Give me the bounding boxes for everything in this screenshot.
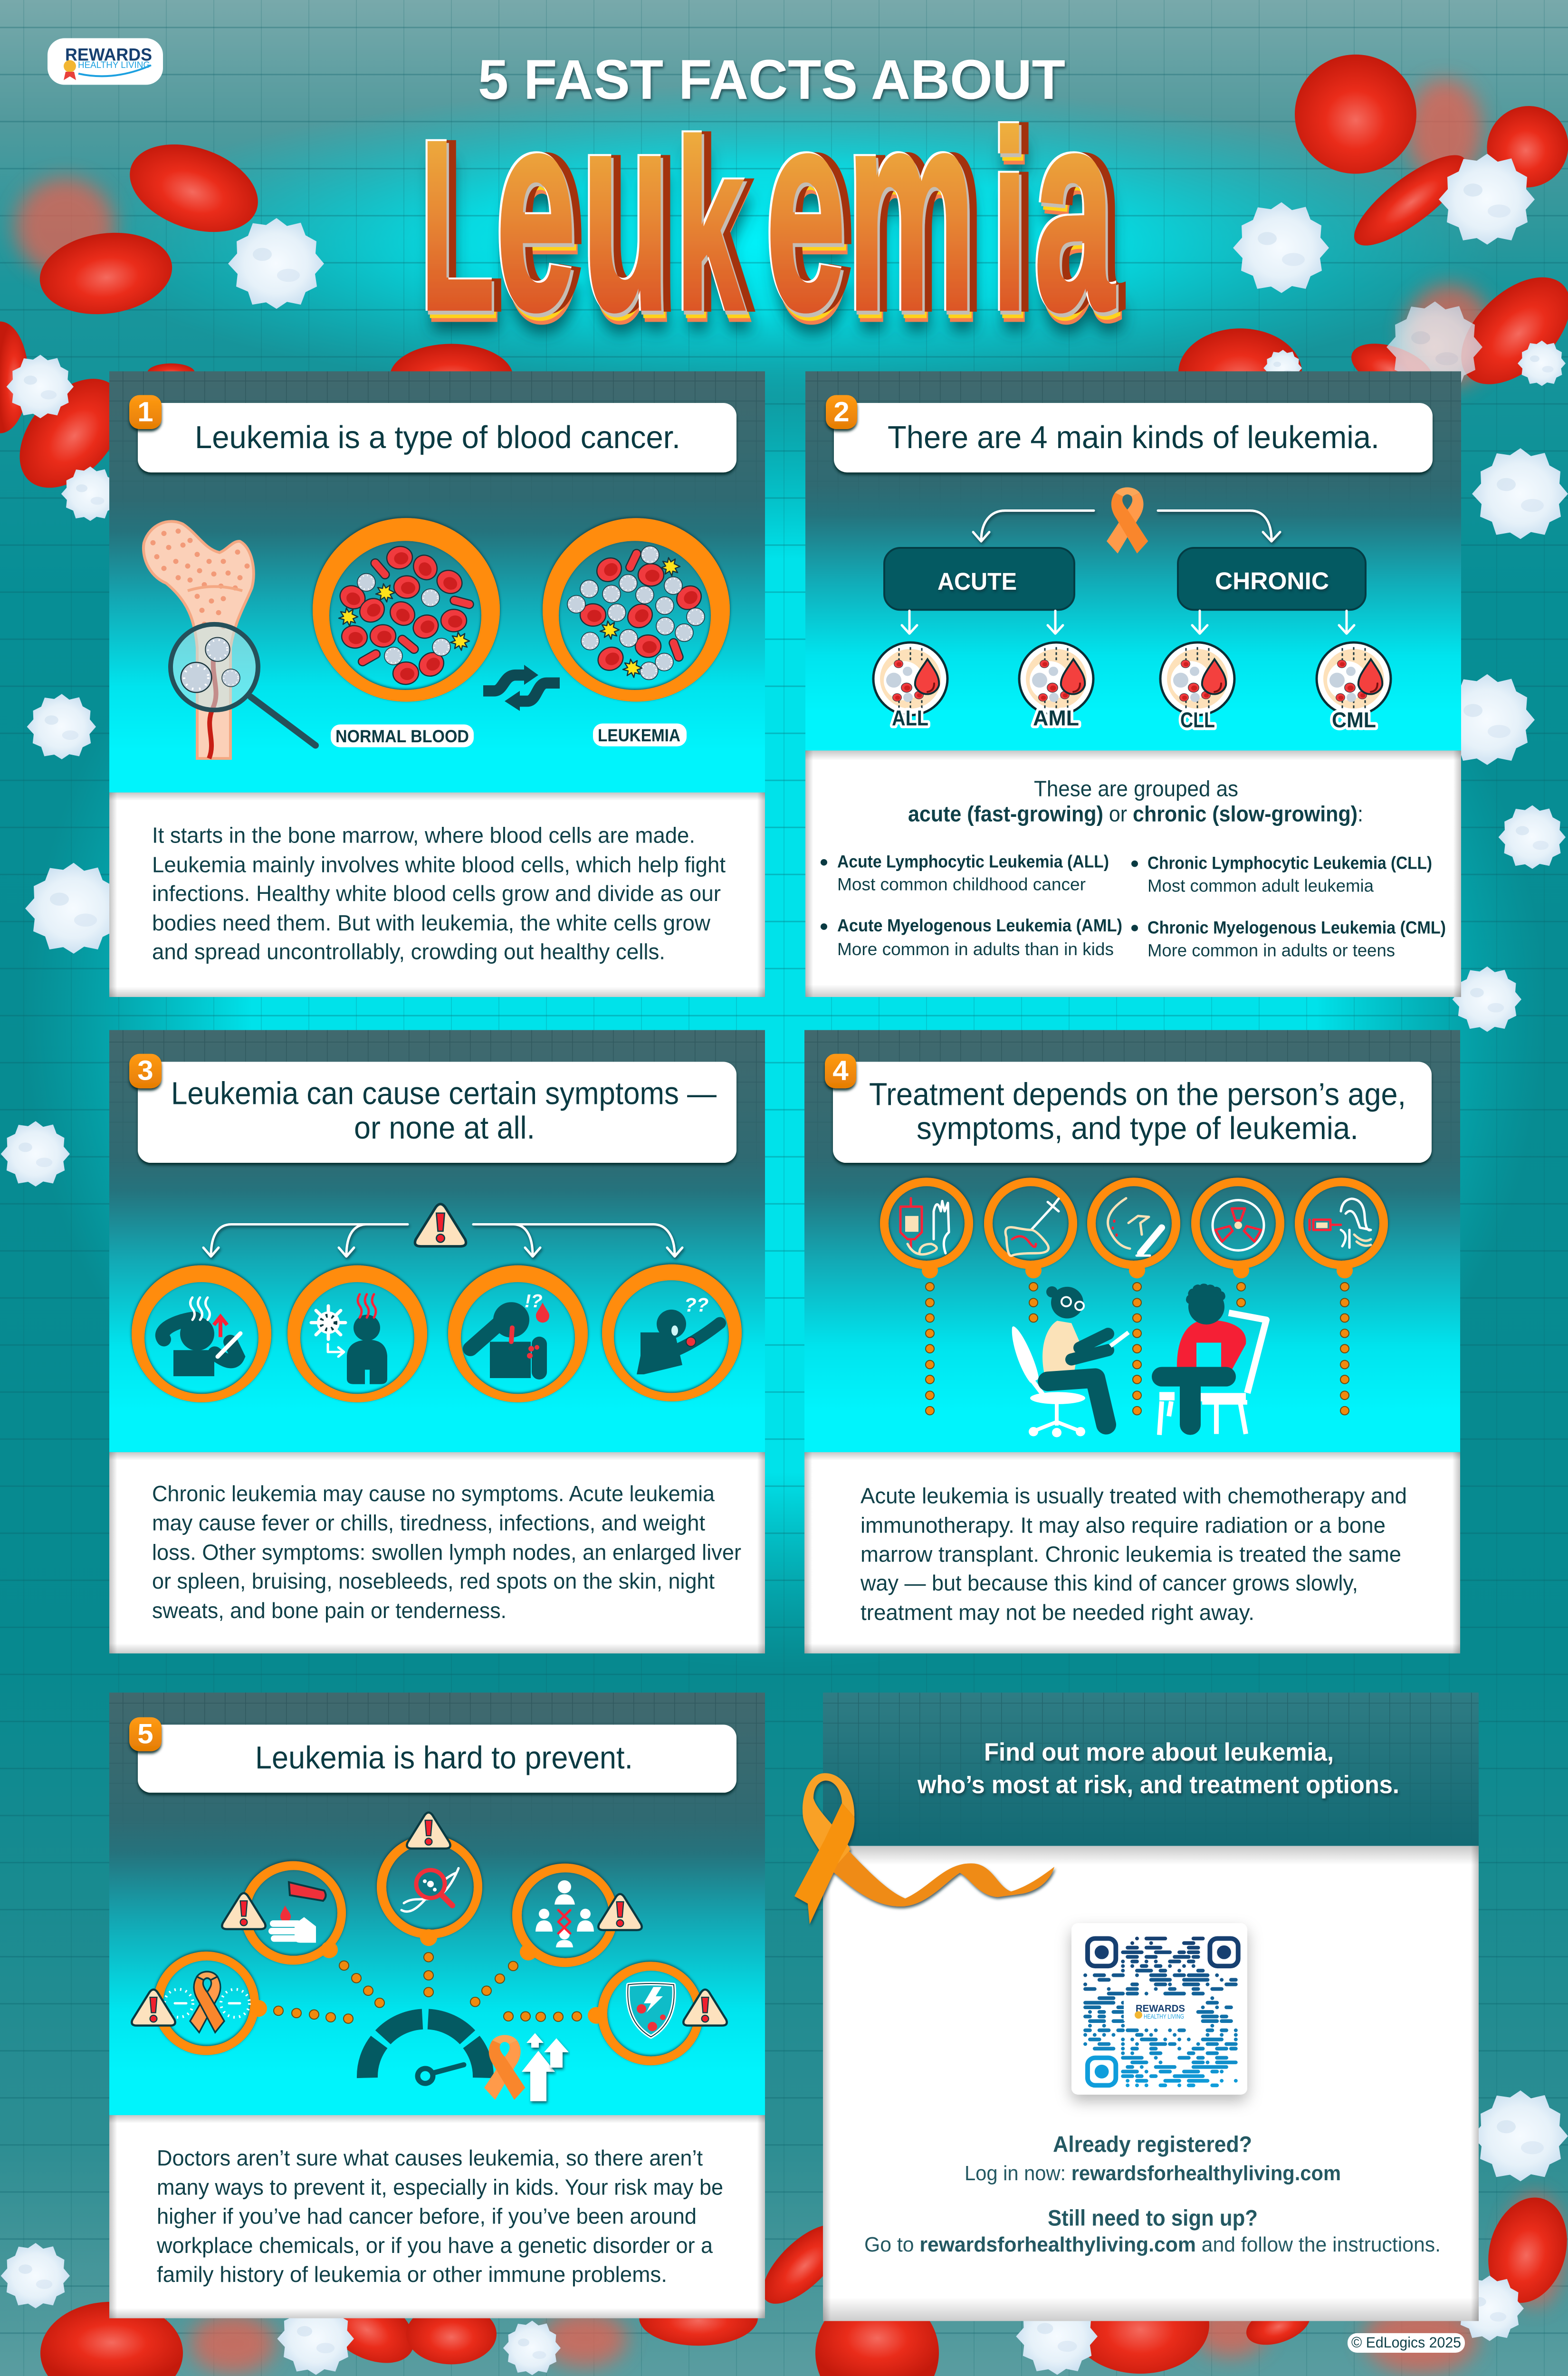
title: Leukemia: a	[1033, 50, 1115, 368]
risk ring: chemicals	[222, 1861, 346, 1964]
icon: CML	[1317, 642, 1391, 732]
call to action header	[823, 1693, 1479, 1846]
treatment ring: radiation	[1191, 1178, 1284, 1278]
list of leukemia types: Acute Lymphocytic Leukemia (ALL)	[837, 852, 1109, 871]
icon: ribbon and up arrows	[484, 2033, 569, 2101]
illustration: doctor	[1013, 1286, 1128, 1437]
heading pill	[138, 1062, 736, 1163]
list of leukemia types: Acute Myelogenous Leukemia (AML)	[837, 915, 1122, 935]
body text 4: marrow transplant. Chronic leukemia is treated the same	[860, 1542, 1401, 1566]
sign in text: Log in now: rewardsforhealthyliving.com	[965, 2163, 1341, 2185]
QR code: HEALTHY LIVING	[1144, 2012, 1184, 2020]
sign in text: Go to rewardsforhealthyliving.com and follow the instructions.	[864, 2234, 1441, 2256]
heading pill: Treatment depends on the person’s age,	[869, 1077, 1406, 1112]
logo	[48, 38, 163, 85]
dotted lines	[926, 1283, 1349, 1415]
box: chronic	[1178, 548, 1366, 610]
logo: HEALTHY LIVING	[78, 60, 150, 70]
number badge 5: 5	[137, 1718, 153, 1749]
title: Leukemia: L	[419, 90, 494, 358]
treatment ring: immunotherapy	[984, 1178, 1077, 1278]
list of leukemia types: Most common adult leukemia	[1147, 876, 1374, 895]
call to action header: who’s most at risk, and treatment options.	[917, 1771, 1399, 1799]
body text 3: or spleen, bruising, nosebleeds, red spots on the skin, night	[152, 1569, 715, 1593]
sign in text	[864, 2132, 1441, 2256]
body text 5: many ways to prevent it, especially in kids. Your risk may be	[157, 2175, 723, 2200]
label: leukemia: LEUKEMIA	[598, 725, 680, 745]
heading pill: Leukemia can cause certain symptoms —	[171, 1076, 717, 1111]
heading pill	[833, 1062, 1432, 1163]
ring: leukemia	[543, 518, 730, 701]
symptom ring: fever	[132, 1265, 271, 1402]
body text 3: sweats, and bone pain or tenderness.	[152, 1598, 507, 1623]
intro text: These are grouped as	[1034, 776, 1238, 801]
copyright: © EdLogics 2025	[1351, 2334, 1461, 2351]
risk ring: family history	[512, 1864, 642, 1967]
risk ring: genetics	[377, 1812, 482, 1946]
symptom ring: skin spots: ??	[684, 1293, 708, 1316]
body text 5: family history of leukemia or other immune problems.	[157, 2262, 667, 2287]
box: acute	[884, 548, 1074, 610]
body text 4: Acute leukemia is usually treated with chemotherapy and	[860, 1484, 1407, 1508]
risk ring: immune problems	[588, 1962, 727, 2065]
body text 3: Chronic leukemia may cause no symptoms. Acute leukemia	[152, 1481, 715, 1506]
body text 5	[156, 2146, 723, 2287]
QR code	[1071, 1923, 1247, 2095]
box: chronic: CHRONIC	[1215, 567, 1329, 594]
icon: CLL	[1160, 642, 1234, 732]
icon: ALL	[873, 642, 947, 730]
body text 4: treatment may not be needed right away.	[860, 1600, 1254, 1625]
treatment ring: transplant	[1087, 1178, 1180, 1278]
logo: REWARDS	[65, 45, 152, 64]
treatment ring: spinal injection	[1295, 1178, 1388, 1278]
panel 5: prevention	[109, 1693, 765, 2318]
panel 3: symptoms	[109, 1030, 765, 1653]
number badge 2: 2	[833, 396, 850, 427]
symptom ring: infections	[287, 1265, 427, 1402]
ring: normal blood	[313, 518, 500, 702]
heading pill	[138, 1725, 736, 1793]
number badge 3	[129, 1054, 162, 1088]
title: Leukemia	[419, 50, 1115, 368]
symptom ring: nosebleed	[448, 1265, 588, 1402]
list of leukemia types: Most common childhood cancer	[837, 874, 1086, 894]
body text 1: infections. Healthy white blood cells grow and divide as our	[152, 881, 721, 906]
number badge 3: 3	[137, 1054, 153, 1086]
heading: 5 fast facts about: 5 FAST FACTS ABOUT	[478, 48, 1065, 111]
symptom ring: skin spots	[602, 1265, 742, 1401]
arrows from warning	[203, 1224, 682, 1256]
body text 3: may cause fever or chills, tiredness, infections, and weight	[152, 1511, 705, 1535]
body text 4: immunotherapy. It may also require radiation or a bone	[860, 1513, 1386, 1537]
heading pill: Leukemia is a type of blood cancer.	[195, 420, 680, 455]
icon: AML: AML	[1033, 706, 1079, 730]
title: Leukemia: e	[765, 50, 845, 368]
illustration: patient	[1159, 1288, 1266, 1435]
heading pill: symptoms, and type of leukemia.	[917, 1111, 1358, 1146]
heading pill	[138, 403, 736, 472]
body text 3: loss. Other symptoms: swollen lymph nodes, an enlarged liver	[152, 1540, 741, 1564]
body text 1	[152, 823, 726, 964]
title: Leukemia: i	[991, 79, 1026, 361]
number badge 5	[129, 1717, 162, 1751]
list of leukemia types: Chronic Myelogenous Leukemia (CML)	[1147, 918, 1446, 938]
body text 5: workplace chemicals, or if you have a genetic disorder or a	[156, 2233, 713, 2258]
body text 1: bodies need them. But with leukemia, the white cells grow	[152, 910, 710, 935]
treatment ring: chemotherapy	[880, 1178, 973, 1278]
sign in text: Already registered?	[1053, 2132, 1252, 2157]
title: Leukemia: k	[675, 90, 744, 358]
body text 1: Leukemia mainly involves white blood cells, which help fight	[152, 853, 726, 877]
icon: large orange ribbon	[794, 1773, 1054, 1924]
icon: orange ribbon	[1107, 487, 1148, 554]
number badge 2	[826, 395, 857, 429]
heading pill	[834, 403, 1433, 472]
icon: warning	[415, 1204, 466, 1246]
number badge 4	[825, 1054, 856, 1088]
intro text: acute (fast-growing) or chronic (slow-growing):	[908, 802, 1363, 826]
heading pill: There are 4 main kinds of leukemia.	[888, 420, 1379, 455]
title: Leukemia: u	[581, 50, 669, 368]
icon: ALL: ALL	[892, 706, 928, 730]
title: Leukemia: m	[846, 50, 975, 368]
list of leukemia types: More common in adults or teens	[1147, 940, 1395, 960]
dotted connectors	[274, 1953, 582, 2023]
number badge 4: 4	[832, 1054, 849, 1086]
heading pill: Leukemia is hard to prevent.	[255, 1740, 633, 1775]
QR code: REWARDS	[1136, 2002, 1185, 2014]
body text 5: higher if you’ve had cancer before, if you’ve been around	[157, 2204, 697, 2228]
list of leukemia types: More common in adults than in kids	[837, 939, 1114, 959]
body text 5: Doctors aren’t sure what causes leukemia, so there aren’t	[157, 2146, 703, 2170]
panel 4: treatment	[804, 1030, 1460, 1653]
number badge 1: 1	[137, 396, 153, 427]
small arrows	[902, 611, 1354, 633]
label: normal blood: NORMAL BLOOD	[335, 726, 469, 746]
number badge 1	[129, 395, 162, 429]
body text 4	[860, 1484, 1407, 1625]
heading pill: or none at all.	[354, 1111, 535, 1146]
body text 4: way — but because this kind of cancer grows slowly,	[860, 1571, 1358, 1595]
call to action header: Find out more about leukemia,	[984, 1738, 1334, 1766]
panel 2: kinds of leukemia	[805, 371, 1461, 997]
title: Leukemia: e	[495, 50, 575, 368]
icon: CML: CML	[1332, 708, 1376, 732]
arrows from ribbon	[973, 511, 1280, 541]
intro text	[908, 776, 1363, 826]
icon: risk gauge	[367, 2019, 483, 2083]
sign in text: Still need to sign up?	[1048, 2206, 1258, 2231]
panel 1: blood cancer	[109, 371, 765, 997]
icon: CLL: CLL	[1180, 708, 1215, 732]
icon: bone with magnifier	[143, 521, 316, 758]
symptom ring: nosebleed: !?	[525, 1291, 543, 1312]
icon: swap arrows	[483, 665, 560, 711]
box: acute: ACUTE	[937, 568, 1017, 595]
risk ring: previous cancer	[132, 1952, 267, 2055]
list of leukemia types: Chronic Lymphocytic Leukemia (CLL)	[1147, 853, 1432, 872]
body text 1: and spread uncontrollably, crowding out healthy cells.	[152, 939, 665, 964]
body text 3	[152, 1481, 741, 1623]
panel 6: find out more	[794, 1693, 1479, 2321]
list of leukemia types	[821, 852, 1446, 960]
icon: AML	[1019, 642, 1093, 730]
body text 1: It starts in the bone marrow, where blood cells are made.	[152, 823, 695, 847]
